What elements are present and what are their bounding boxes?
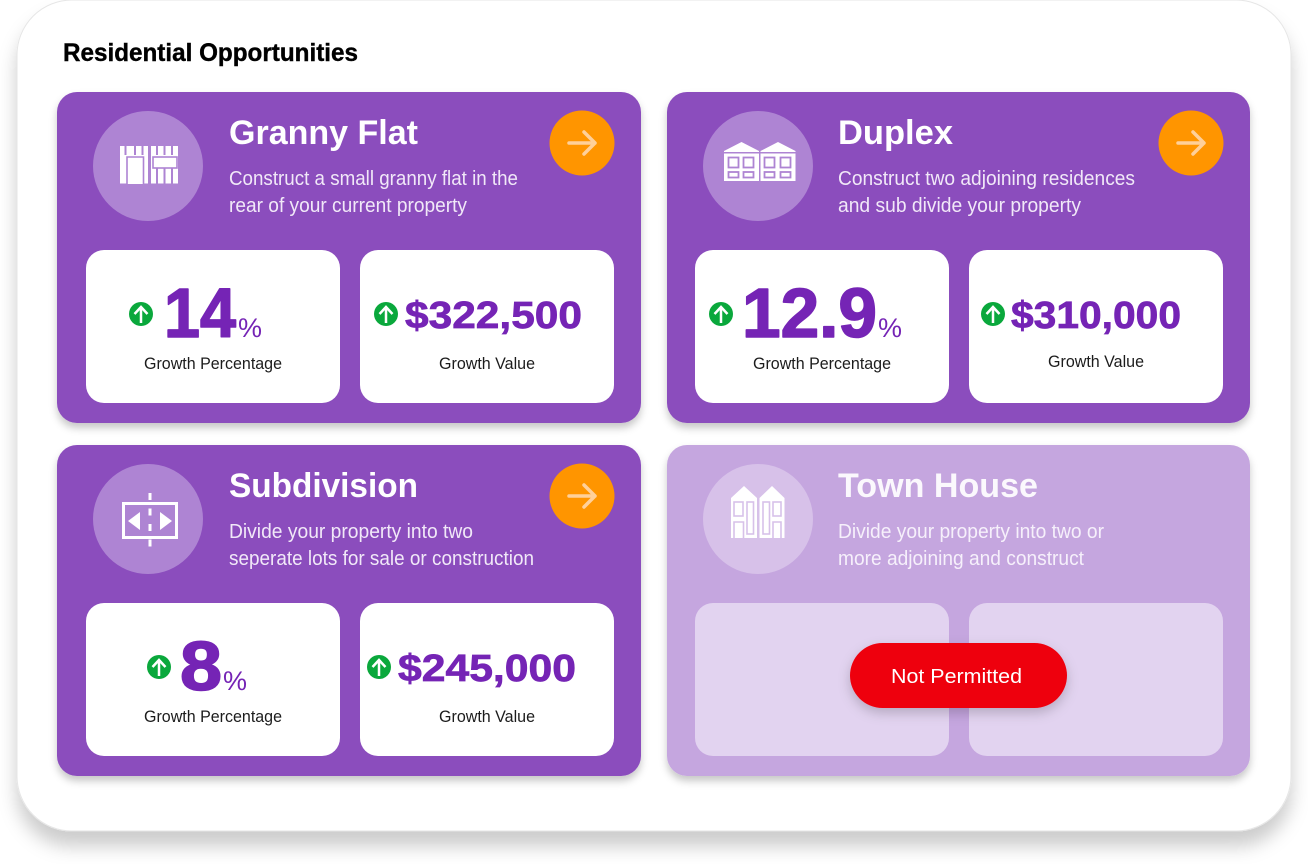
stat: growth percentage: % [238, 313, 262, 343]
heading: Granny Flat [229, 114, 418, 152]
empty stat box right [969, 603, 1223, 756]
stat: growth value [969, 250, 1223, 403]
description: seperate lots for sale or construction [229, 548, 534, 570]
stat: growth percentage: Growth Percentage [144, 707, 282, 726]
not permitted badge [850, 643, 1067, 708]
stat: growth percentage: 12.9 [742, 274, 877, 352]
arrow button [550, 110, 614, 176]
icon: granny flat [93, 111, 203, 221]
icon: duplex [703, 111, 813, 221]
stat: growth percentage: % [223, 666, 247, 696]
stat: growth percentage: 14 [164, 274, 236, 352]
not permitted badge: Not Permitted [891, 666, 1022, 688]
stat: growth value: $322,500 [405, 295, 582, 337]
arrow button [1158, 110, 1224, 176]
panel: Town House [667, 445, 1250, 776]
stat: growth value: $310,000 [1011, 295, 1181, 337]
stat: growth percentage: % [878, 313, 902, 343]
description [838, 168, 1135, 217]
panel: Granny Flat [57, 92, 641, 423]
stat: growth value: Growth Value [439, 707, 535, 726]
heading: Town House [838, 467, 1038, 505]
stat: growth percentage [86, 603, 340, 756]
description: Divide your property into two or [838, 521, 1104, 543]
empty stat box left [695, 603, 949, 756]
title: Residential Opportunities [63, 39, 358, 67]
panel: Subdivision [57, 445, 641, 776]
stat: growth value: Growth Value [1048, 352, 1144, 371]
stat: growth value [360, 603, 614, 756]
panel: Duplex [667, 92, 1250, 423]
icon: subdivision [93, 464, 203, 574]
heading: Subdivision [229, 467, 418, 505]
arrow button [550, 464, 614, 528]
description [838, 521, 1104, 570]
description [229, 521, 534, 570]
stat: growth value: Growth Value [439, 354, 535, 373]
stat: growth percentage [86, 250, 340, 403]
stat: growth percentage [695, 250, 949, 403]
description: and sub divide your property [838, 195, 1081, 217]
stat: growth value [360, 250, 614, 403]
description: Construct two adjoining residences [838, 168, 1135, 190]
description: more adjoining and construct [838, 548, 1084, 570]
description: Construct a small granny flat in the [229, 168, 518, 190]
stat: growth percentage: Growth Percentage [144, 354, 282, 373]
description [229, 168, 518, 217]
icon: town house [703, 464, 813, 574]
description: Divide your property into two [229, 521, 473, 543]
description: rear of your current property [229, 195, 467, 217]
stat: growth percentage: 8 [180, 627, 222, 705]
stat: growth percentage: Growth Percentage [753, 354, 891, 373]
stat: growth value: $245,000 [398, 648, 576, 690]
heading: Duplex [838, 114, 953, 152]
